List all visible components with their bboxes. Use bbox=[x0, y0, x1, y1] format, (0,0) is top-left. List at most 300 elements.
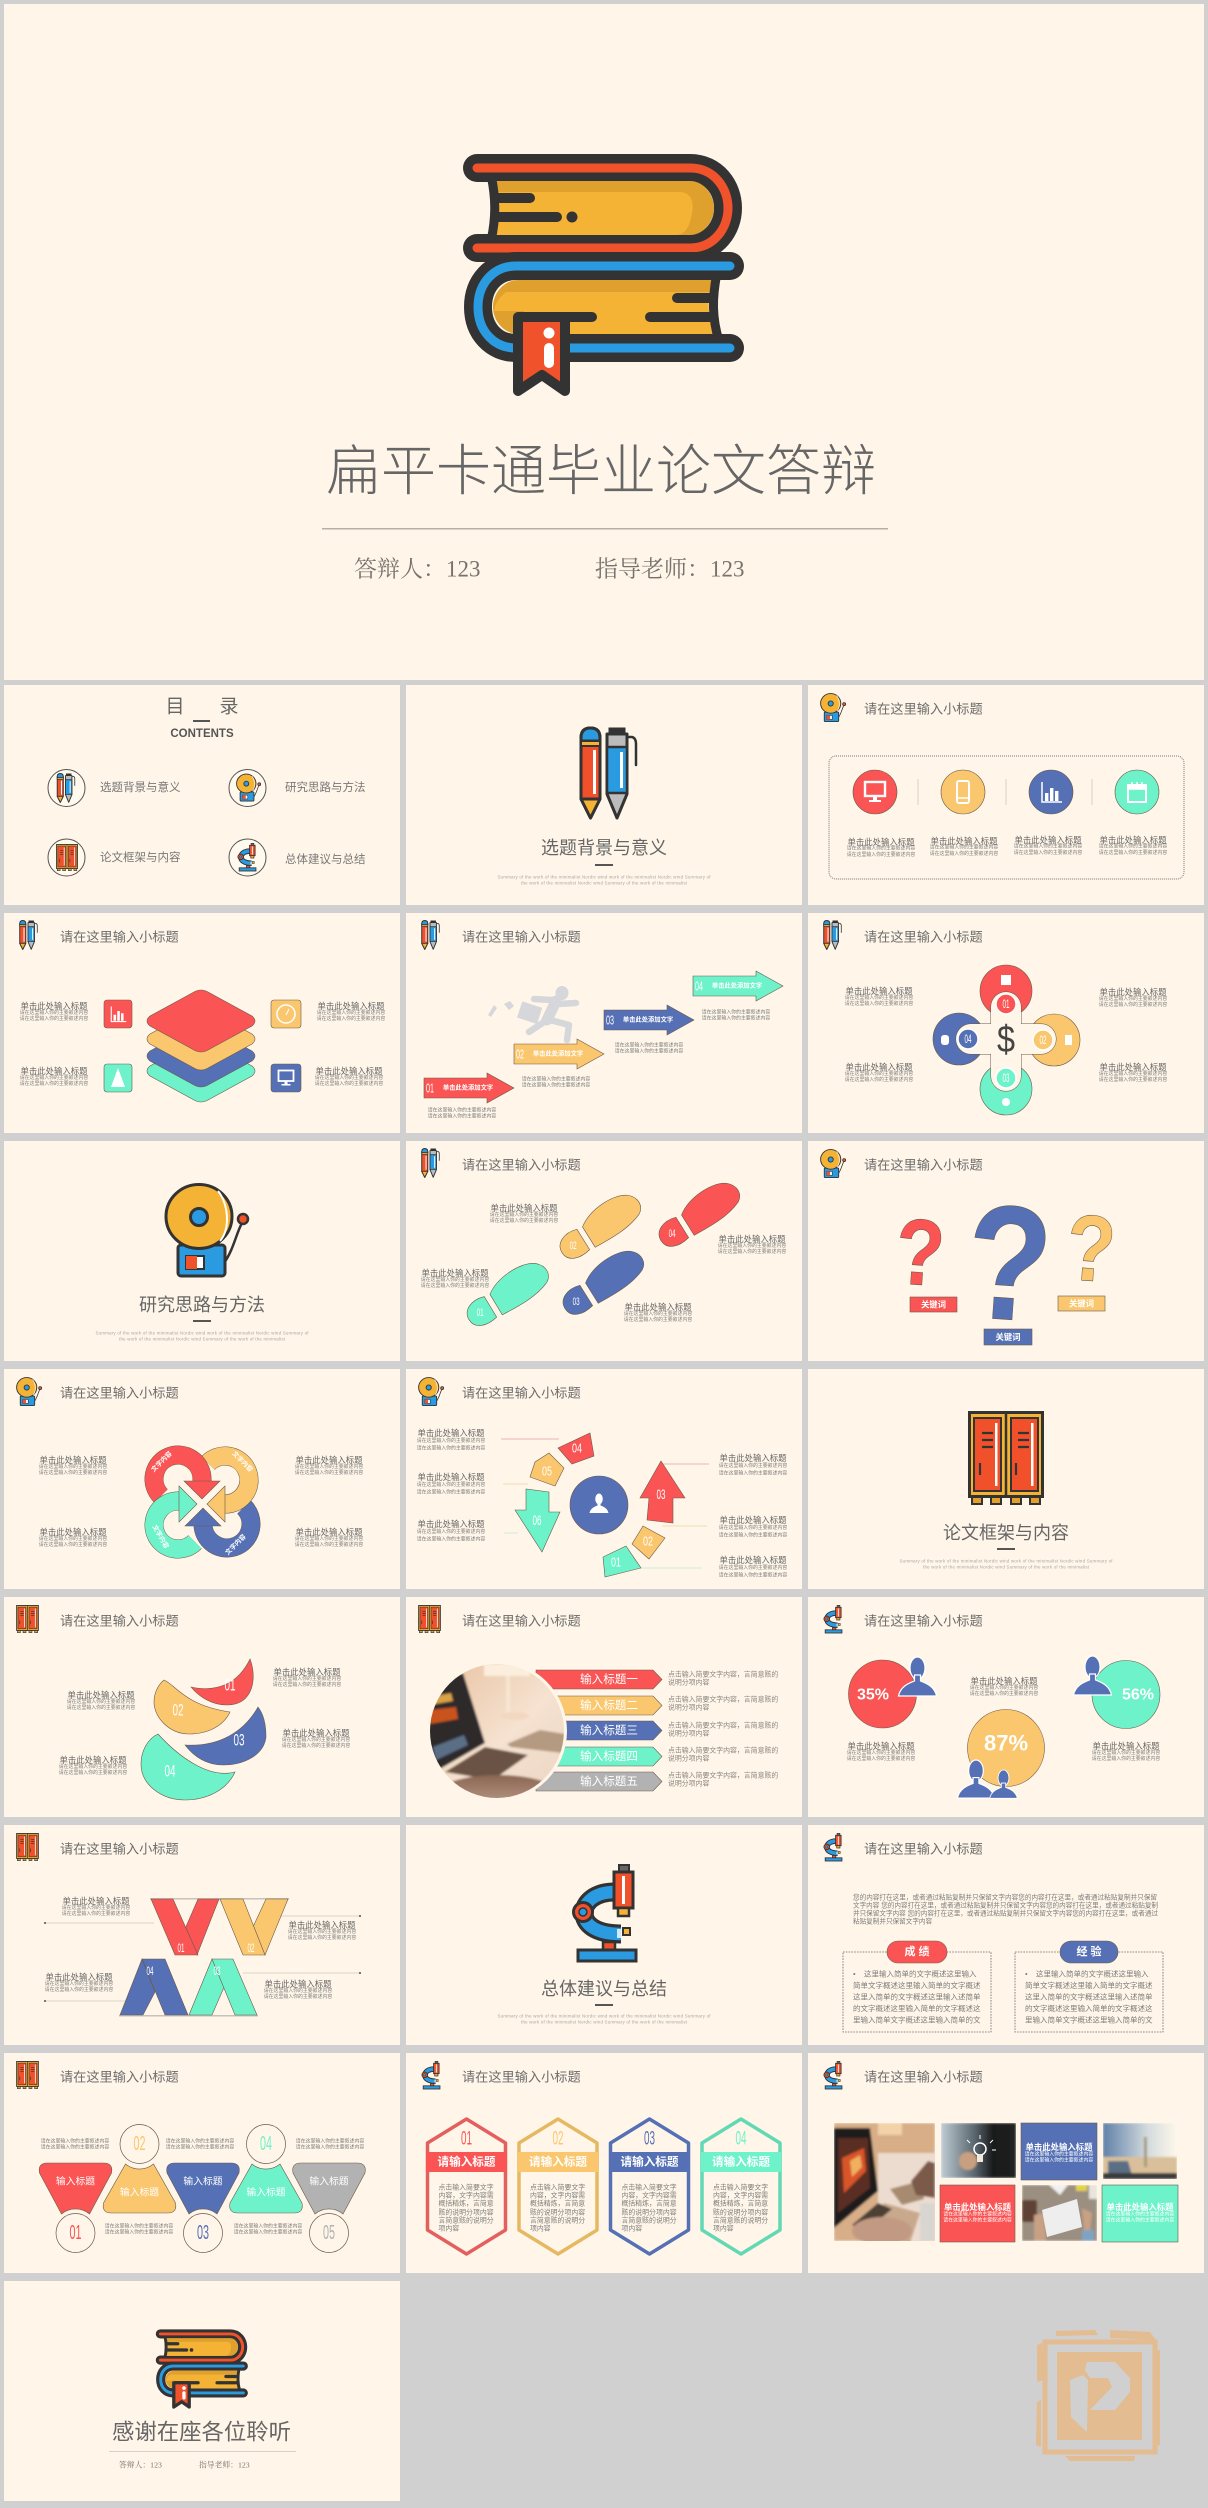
text block: 请在这里输入你的主要叙述内容 bbox=[45, 1986, 113, 1993]
text block: 单击此处输入标题 bbox=[930, 836, 998, 846]
ribbon four: 输入标题四 bbox=[580, 1749, 638, 1763]
box: experience: • bbox=[1025, 1970, 1028, 1978]
card 04: 项内容 bbox=[713, 2224, 734, 2232]
heading: contents: 录 bbox=[219, 696, 239, 718]
card 02: 言简意赅的说明分 bbox=[530, 2216, 585, 2224]
funnel 4: 输入标题 bbox=[246, 2186, 286, 2198]
text block: 单击此处输入标题 bbox=[848, 837, 915, 847]
header bbox=[419, 1605, 581, 1633]
text block: 请在这里输入你的主要叙述内容 bbox=[282, 1736, 350, 1743]
stat 56% bbox=[1074, 1656, 1160, 1728]
text block: 单击此处输入标题 bbox=[1100, 1062, 1167, 1072]
text block: 请在这里输入你的主要叙述内容 bbox=[417, 1528, 485, 1535]
icon: bell bbox=[166, 1184, 248, 1276]
tile: red: 单击此处输入标题 bbox=[944, 2202, 1012, 2212]
panel: four hexagon cards bbox=[406, 2053, 802, 2273]
text block: 单击此处输入标题 bbox=[68, 1690, 135, 1700]
footprint 03: 03 bbox=[573, 1296, 580, 1308]
text block: 请在这里输入你的主要叙述内容 bbox=[624, 1310, 692, 1317]
text block bbox=[264, 1979, 332, 2000]
text block: 单击此处输入标题 bbox=[1092, 1741, 1160, 1751]
section title: 论文框架与内容 bbox=[943, 1523, 1069, 1543]
text block bbox=[719, 1555, 787, 1578]
text block: 请在这里输入你的主要叙述内容 bbox=[417, 1488, 485, 1496]
paragraph: 并只保留文字内容 您的内容打在这里，或者通过粘贴复制并只保留文字内容您的内容打在这里，或者通过 bbox=[853, 1908, 1158, 1918]
text block: 单击此处输入标题 bbox=[720, 1555, 787, 1565]
header: 请在这里输入小标题 bbox=[864, 700, 983, 716]
section summary bbox=[96, 1330, 309, 1342]
text block bbox=[417, 1428, 485, 1452]
section summary: Summary of the work of the minimalist Nordic wind work of the minimalist Nordic wind Summary of bbox=[900, 1558, 1113, 1564]
text block: 请在这里输入你的主要叙述内容 bbox=[847, 851, 915, 858]
text block: 请在这里输入你的主要叙述内容 bbox=[317, 1009, 385, 1016]
arrow 02: 单击此处添加文字 bbox=[533, 1048, 583, 1058]
tab 05: 05 bbox=[542, 1464, 552, 1478]
header bbox=[824, 1605, 983, 1633]
panel: photo with ribbons bbox=[406, 1597, 802, 1817]
text block bbox=[59, 1755, 127, 1776]
box: results: • bbox=[853, 1970, 856, 1978]
text block: 请在这里输入你的主要叙述内容 bbox=[845, 1000, 913, 1007]
ribbon one: 输入标题一 bbox=[580, 1672, 638, 1686]
header: 请在这里输入小标题 bbox=[60, 928, 179, 944]
text block: 请在这里输入你的主要叙述内容 bbox=[273, 1681, 341, 1688]
card 01: 01 bbox=[461, 2128, 472, 2150]
footprint 04: 04 bbox=[669, 1228, 676, 1240]
text block: 单击此处输入标题 bbox=[20, 1066, 88, 1076]
card 04: 点击输入简要文字 bbox=[713, 2182, 768, 2192]
icon: lockers bbox=[970, 1412, 1042, 1504]
header bbox=[17, 2061, 179, 2089]
note: 请在这里输入你的主要叙述内容 bbox=[234, 2228, 302, 2236]
header: 请在这里输入小标题 bbox=[60, 1612, 179, 1628]
footprint 01: 01 bbox=[477, 1307, 484, 1319]
text block: 请在这里输入你的主要叙述内容 bbox=[718, 1248, 786, 1255]
header bbox=[419, 1378, 581, 1406]
panel: photo mosaic bbox=[808, 2053, 1204, 2273]
text block: 请在这里输入你的主要叙述内容 bbox=[1092, 1749, 1160, 1756]
paragraph: 您的内容打在这里，或者通过粘贴复制并只保留文字内容您的内容打在这里，或者通过粘贴复制并只保留 bbox=[853, 1892, 1157, 1902]
footprint 02 bbox=[551, 1187, 647, 1264]
heading: contents: CONTENTS bbox=[170, 728, 234, 740]
text block: 单击此处输入标题 bbox=[316, 1066, 383, 1076]
text block: 单击此处输入标题 bbox=[274, 1667, 341, 1677]
text block: 单击此处输入标题 bbox=[848, 1741, 915, 1751]
text block: 请在这里输入你的主要叙述内容 bbox=[62, 1910, 130, 1917]
note 03 bbox=[615, 1042, 683, 1054]
text block bbox=[45, 1972, 113, 1993]
header: 请在这里输入小标题 bbox=[462, 2068, 581, 2084]
section summary: Summary of the work of the minimalist Nordic wind work of the minimalist Nordic wind Summary of bbox=[96, 1330, 309, 1336]
tab 02: 02 bbox=[643, 1534, 653, 1548]
text block: 请在这里输入你的主要叙述内容 bbox=[1099, 1001, 1167, 1008]
text block: 单击此处输入标题 bbox=[846, 1062, 913, 1072]
text block: 请在这里输入你的主要叙述内容 bbox=[490, 1217, 558, 1224]
card 04: 请输入标题 bbox=[712, 2154, 770, 2168]
box: results: 的文字概述这里输入简单的文字概述这 bbox=[853, 2003, 981, 2013]
text block: 单击此处输入标题 bbox=[418, 1428, 485, 1438]
label: yellow: 关键词 bbox=[1069, 1298, 1094, 1308]
text block: 单击此处输入标题 bbox=[296, 1527, 363, 1537]
header: 请在这里输入小标题 bbox=[60, 1840, 179, 1856]
box: experience: 简单文字概述这里输入简单的文字概述 bbox=[1025, 1980, 1153, 1990]
arrow 03: 单击此处添加文字 bbox=[623, 1014, 673, 1024]
text block: 请在这里输入你的主要叙述内容 bbox=[264, 1987, 332, 1994]
tab 02 bbox=[632, 1526, 665, 1559]
text block: 请在这里输入你的主要叙述内容 bbox=[282, 1742, 350, 1749]
paragraph: 粘贴复制并只保留文字内容 bbox=[853, 1916, 933, 1926]
card 01: 请输入标题 bbox=[438, 2154, 496, 2168]
arrow 02 bbox=[514, 1039, 604, 1069]
note: 请在这里输入你的主要叙述内容 bbox=[105, 2228, 173, 2236]
text block: 单击此处输入标题 bbox=[60, 1755, 127, 1765]
funnel 3: 输入标题 bbox=[183, 2174, 223, 2188]
text block: 请在这里输入你的主要叙述内容 bbox=[1099, 995, 1167, 1002]
card 01: 内容，文字内容需 bbox=[438, 2190, 494, 2200]
funnel 3 bbox=[167, 2163, 239, 2214]
note: 请在这里输入你的主要叙述内容 bbox=[296, 2138, 364, 2144]
text block: 单击此处输入标题 bbox=[1014, 835, 1082, 845]
panel: section 4 bbox=[406, 1825, 802, 2045]
text block: 请在这里输入你的主要叙述内容 bbox=[67, 1698, 135, 1705]
arrow 04 bbox=[693, 971, 783, 1001]
header bbox=[422, 1149, 581, 1177]
card 02: 点击输入简要文字 bbox=[530, 2182, 585, 2192]
note bbox=[166, 2138, 234, 2150]
note 04 bbox=[702, 1008, 770, 1022]
panel: four icons bbox=[808, 685, 1204, 905]
icon: monitor bbox=[853, 770, 897, 814]
text block: 请在这里输入你的主要叙述内容 bbox=[39, 1469, 107, 1476]
box: results: 简单文字概述这里输入简单的文字概述 bbox=[853, 1980, 981, 1990]
note 04: 请在这里输入你的主要叙述内容 bbox=[702, 1014, 770, 1022]
tile: red: 请在这里输入你的主要叙述内容 bbox=[943, 2210, 1012, 2218]
box: results: 成 绩 bbox=[904, 1944, 930, 1958]
description 3: 说明分项内容 bbox=[668, 1728, 709, 1738]
text block: 请在这里输入你的主要叙述内容 bbox=[59, 1763, 127, 1770]
item: summary: 总体建议与总结 bbox=[285, 852, 366, 866]
text block: 请在这里输入你的主要叙述内容 bbox=[20, 1074, 88, 1081]
arrow 01 bbox=[424, 1073, 514, 1103]
item: topic background: 选题背景与意义 bbox=[100, 780, 181, 794]
box: experience: 这里入简单的文字概述这里输入述简单 bbox=[1025, 1992, 1153, 2002]
text block: 单击此处输入标题 bbox=[720, 1515, 787, 1525]
photo: paper on desk bbox=[1022, 2185, 1097, 2241]
panel: four swirl arrows bbox=[4, 1369, 400, 1589]
note 02: 请在这里输入你的主要叙述内容 bbox=[522, 1082, 590, 1088]
description 4 bbox=[668, 1746, 778, 1762]
icon: monitor tile bbox=[271, 1064, 301, 1092]
text block: 请在这里输入你的主要叙述内容 bbox=[1014, 849, 1082, 856]
card 02: 赅的说明分项内容 bbox=[530, 2208, 585, 2216]
text block: 请在这里输入你的主要叙述内容 bbox=[490, 1211, 558, 1218]
ribbon two bbox=[536, 1696, 662, 1715]
ribbon four bbox=[536, 1747, 662, 1766]
closing title: 感谢在座各位聆听 bbox=[112, 2420, 291, 2444]
letter V yellow bbox=[220, 1899, 288, 1955]
text block: 请在这里输入你的主要叙述内容 bbox=[39, 1541, 107, 1548]
item: summary bbox=[229, 839, 366, 876]
droplet 04: 04 bbox=[164, 1762, 176, 1780]
panel: stacked diamonds bbox=[4, 913, 400, 1133]
arrow 03 bbox=[640, 1461, 685, 1523]
photo: laptop bbox=[430, 1664, 564, 1798]
icon: calendar bbox=[1115, 770, 1159, 814]
description 4: 点击输入简要文字内容，言简意赅的 bbox=[668, 1746, 778, 1754]
funnel 5 bbox=[293, 2163, 365, 2214]
photo: laptop and hand bbox=[834, 2123, 938, 2245]
footprint 01 bbox=[459, 1255, 555, 1331]
cross diagram: 02 bbox=[1040, 1033, 1047, 1047]
text block: 单击此处输入标题 bbox=[296, 1455, 363, 1465]
tab 04 bbox=[558, 1433, 594, 1464]
text block: 请在这里输入你的主要叙述内容 bbox=[295, 1535, 363, 1542]
tile: blue: 请在这里输入你的主要叙述内容 bbox=[1025, 2150, 1093, 2158]
text block: 请在这里输入你的主要叙述内容 bbox=[417, 1444, 485, 1452]
text block: 请在这里输入你的主要叙述内容 bbox=[417, 1536, 485, 1542]
yellow question mark: ? bbox=[1063, 1195, 1119, 1303]
description 3: 点击输入简要文字内容，言简意赅的 bbox=[668, 1720, 778, 1730]
letter A green bbox=[189, 1959, 257, 2015]
text block bbox=[490, 1203, 558, 1224]
text block: 请在这里输入你的主要叙述内容 bbox=[1099, 1076, 1167, 1083]
tile: blue bbox=[1021, 2123, 1097, 2180]
stat 87%: 87% bbox=[984, 1730, 1028, 1756]
section summary bbox=[498, 2014, 711, 2024]
text block bbox=[39, 1455, 107, 1476]
footprint 03 bbox=[554, 1243, 650, 1320]
note 01: 请在这里输入你的主要叙述内容 bbox=[428, 1112, 496, 1120]
label: red bbox=[910, 1297, 957, 1312]
note: 请在这里输入你的主要叙述内容 bbox=[296, 2144, 364, 2150]
note bbox=[41, 2138, 109, 2150]
respondent: 答辩人：123 bbox=[119, 2460, 162, 2470]
arrow 04: 单击此处添加文字 bbox=[712, 980, 762, 990]
photo: city window bbox=[1103, 2123, 1177, 2179]
icon: microscope bbox=[574, 1865, 636, 1961]
text block bbox=[1014, 835, 1082, 856]
arrow 03: 03 bbox=[656, 1486, 666, 1502]
letter V red: 01 bbox=[178, 1941, 185, 1955]
text block: 请在这里输入你的主要叙述内容 bbox=[295, 1463, 363, 1470]
stat 56%: 56% bbox=[1122, 1686, 1154, 1704]
arrow 01: 01 bbox=[426, 1080, 434, 1096]
section summary bbox=[498, 874, 711, 886]
description 3 bbox=[668, 1720, 778, 1738]
item: research method bbox=[229, 770, 366, 806]
label: blue bbox=[984, 1329, 1032, 1345]
funnel 1 bbox=[39, 2163, 112, 2214]
dotted frame bbox=[829, 756, 1184, 879]
header bbox=[422, 921, 581, 949]
note bbox=[234, 2222, 302, 2236]
box: results bbox=[843, 1941, 991, 2032]
tab 04: 04 bbox=[572, 1440, 582, 1456]
text block: 单击此处输入标题 bbox=[1100, 835, 1167, 845]
card 04: 赅的说明分项内容 bbox=[713, 2208, 768, 2216]
panel: six step cycle bbox=[406, 1369, 802, 1589]
text block: 请在这里输入你的主要叙述内容 bbox=[317, 1015, 385, 1022]
panel: footprints bbox=[406, 1141, 802, 1361]
text block bbox=[845, 986, 913, 1007]
funnel 5: 输入标题 bbox=[309, 2174, 349, 2188]
icon: chart bbox=[1029, 770, 1073, 814]
icon: pens bbox=[581, 728, 636, 818]
tab 01: 01 bbox=[611, 1554, 621, 1570]
header bbox=[821, 1150, 983, 1178]
arrow 06: 06 bbox=[532, 1512, 542, 1528]
text block bbox=[845, 1062, 913, 1083]
header bbox=[17, 1833, 179, 1861]
text block: 请在这里输入你的主要叙述内容 bbox=[1092, 1755, 1160, 1762]
ribbon three: 输入标题三 bbox=[580, 1723, 638, 1737]
header: 请在这里输入小标题 bbox=[60, 1384, 179, 1400]
text block: 请在这里输入你的主要叙述内容 bbox=[295, 1469, 363, 1476]
panel: rising arrows bbox=[406, 913, 802, 1133]
text block bbox=[295, 1527, 363, 1548]
tile: red: 请在这里输入你的主要叙述内容 bbox=[943, 2216, 1012, 2224]
card 03: 点击输入简要文字 bbox=[622, 2182, 677, 2192]
box: experience: 经 验 bbox=[1076, 1944, 1102, 1958]
text block: 单击此处输入标题 bbox=[40, 1527, 107, 1537]
card 04 bbox=[701, 2119, 781, 2254]
text block: 单击此处输入标题 bbox=[62, 1896, 130, 1906]
label: blue: 关键词 bbox=[995, 1332, 1021, 1342]
text block: 请在这里输入你的主要叙述内容 bbox=[845, 1076, 913, 1083]
center person bbox=[570, 1476, 628, 1534]
droplet 04 bbox=[141, 1734, 235, 1800]
text block bbox=[930, 836, 998, 857]
arrow 04: 04 bbox=[695, 978, 703, 994]
note: 请在这里输入你的主要叙述内容 bbox=[166, 2138, 234, 2144]
text block bbox=[719, 1515, 787, 1538]
text block: 请在这里输入你的主要叙述内容 bbox=[417, 1437, 485, 1444]
section summary: the work of the minimalist Nordic wind Summary of the work of the minimalist bbox=[521, 2020, 688, 2024]
panel: droplets bbox=[4, 1597, 400, 1817]
note: 请在这里输入你的主要叙述内容 bbox=[166, 2144, 234, 2150]
text block: 单击此处输入标题 bbox=[1100, 987, 1167, 997]
note 04: 请在这里输入你的主要叙述内容 bbox=[702, 1008, 770, 1016]
section summary: Summary of the work of the minimalist Nordic wind work of the minimalist Nordic wind Summary of bbox=[498, 874, 711, 880]
header bbox=[821, 694, 983, 722]
text block: 请在这里输入你的主要叙述内容 bbox=[845, 994, 913, 1001]
card 03: 内容，文字内容需 bbox=[622, 2190, 677, 2200]
icon: chart tile bbox=[104, 1000, 132, 1028]
text block: 请在这里输入你的主要叙述内容 bbox=[719, 1462, 787, 1469]
droplet 01 bbox=[191, 1659, 253, 1705]
panel: contents bbox=[4, 685, 400, 905]
stat 35%: 35% bbox=[857, 1686, 889, 1704]
paragraph: 文字内容 您的内容打在这里，或者通过粘贴复制并只保留文字内容您的内容打在这里，或者通过粘贴复制 bbox=[853, 1900, 1158, 1910]
ribbon one bbox=[536, 1670, 662, 1689]
card 02: 02 bbox=[552, 2128, 564, 2150]
text block: 单击此处输入标题 bbox=[40, 1455, 107, 1465]
box: experience bbox=[1015, 1941, 1163, 2032]
card 03: 请输入标题 bbox=[621, 2154, 679, 2168]
tile: blue: 请在这里输入你的主要叙述内容 bbox=[1025, 2156, 1093, 2164]
header: 请在这里输入小标题 bbox=[864, 1156, 983, 1172]
note 01 bbox=[428, 1106, 496, 1120]
swirl diagram: 文字内容 bbox=[223, 1532, 248, 1557]
card 04: 内容，文字内容需 bbox=[713, 2190, 768, 2200]
droplet 02: 02 bbox=[172, 1700, 184, 1720]
tile: green: 请在这里输入你的主要叙述内容 bbox=[1106, 2216, 1174, 2224]
description 1: 点击输入简要文字内容，言简意赅的 bbox=[668, 1670, 778, 1678]
text block: 请在这里输入你的主要叙述内容 bbox=[1099, 1070, 1167, 1077]
text block: 请在这里输入你的主要叙述内容 bbox=[417, 1481, 485, 1488]
arrow 02: 02 bbox=[516, 1046, 524, 1062]
text block: 请在这里输入你的主要叙述内容 bbox=[1099, 842, 1167, 850]
blue question mark: ? bbox=[960, 1170, 1058, 1358]
description 5: 点击输入简要文字内容，言简意赅的 bbox=[668, 1770, 778, 1780]
text block: 请在这里输入你的主要叙述内容 bbox=[288, 1928, 356, 1935]
panel: percent circles bbox=[808, 1597, 1204, 1817]
text block: 单击此处输入标题 bbox=[718, 1234, 786, 1244]
text block bbox=[273, 1667, 341, 1688]
letter V red bbox=[151, 1899, 219, 1955]
text block: 单击此处输入标题 bbox=[282, 1728, 350, 1738]
text block bbox=[847, 1741, 915, 1762]
swirl diagram: 文字内容 bbox=[149, 1449, 174, 1474]
card 01: 概括精炼，言简意 bbox=[438, 2198, 494, 2208]
note bbox=[296, 2138, 364, 2150]
tile: green bbox=[1102, 2185, 1178, 2242]
card 02: 请输入标题 bbox=[529, 2154, 587, 2168]
text block bbox=[1099, 835, 1167, 856]
cross diagram: 04 bbox=[964, 1032, 972, 1046]
box: results: 这里输入简单的文字概述这里输入 bbox=[864, 1968, 977, 1978]
label: yellow bbox=[1058, 1296, 1105, 1311]
note: 请在这里输入你的主要叙述内容 bbox=[105, 2222, 173, 2230]
section title: 选题背景与意义 bbox=[541, 838, 667, 858]
description 1 bbox=[668, 1670, 778, 1686]
text block: 请在这里输入你的主要叙述内容 bbox=[20, 1080, 88, 1087]
card 04: 04 bbox=[736, 2128, 747, 2150]
description 5 bbox=[668, 1770, 778, 1788]
panel: five funnels bbox=[4, 2053, 400, 2273]
header: 请在这里输入小标题 bbox=[864, 2068, 983, 2084]
stat 87% bbox=[957, 1710, 1044, 1798]
icon: running man bbox=[488, 986, 576, 1040]
text block: 单击此处输入标题 bbox=[288, 1920, 356, 1930]
ribbon five: 输入标题五 bbox=[580, 1774, 638, 1788]
text block bbox=[421, 1268, 489, 1289]
stat 35% bbox=[848, 1657, 936, 1728]
description 2: 点击输入简要文字内容，言简意赅的 bbox=[668, 1694, 778, 1704]
note 02: 请在这里输入你的主要叙述内容 bbox=[522, 1076, 590, 1082]
arrow 01: 单击此处添加文字 bbox=[443, 1082, 493, 1092]
cross diagram bbox=[933, 965, 1080, 1115]
funnel 4 bbox=[230, 2164, 302, 2213]
box: experience: 里输入简单文字概述这里输入简单的文 bbox=[1025, 2014, 1153, 2024]
arrow 03 bbox=[604, 1005, 694, 1035]
footprint 02: 02 bbox=[570, 1240, 577, 1252]
advisor: 指导老师：123 bbox=[595, 556, 744, 582]
panel: section 3 bbox=[808, 1369, 1204, 1589]
ribbon three bbox=[536, 1721, 662, 1740]
text block bbox=[315, 1066, 383, 1087]
cross diagram: 03 bbox=[1002, 1071, 1010, 1085]
droplet 01: 01 bbox=[224, 1676, 236, 1694]
text block bbox=[39, 1527, 107, 1548]
footprint 04 bbox=[650, 1175, 746, 1252]
card 03 bbox=[610, 2119, 690, 2254]
respondent: 答辩人：123 bbox=[354, 556, 480, 582]
letter A green: 03 bbox=[214, 1964, 221, 1978]
text block: 请在这里输入你的主要叙述内容 bbox=[718, 1242, 786, 1249]
header: 请在这里输入小标题 bbox=[864, 1840, 983, 1856]
text block: 请在这里输入你的主要叙述内容 bbox=[39, 1463, 107, 1470]
